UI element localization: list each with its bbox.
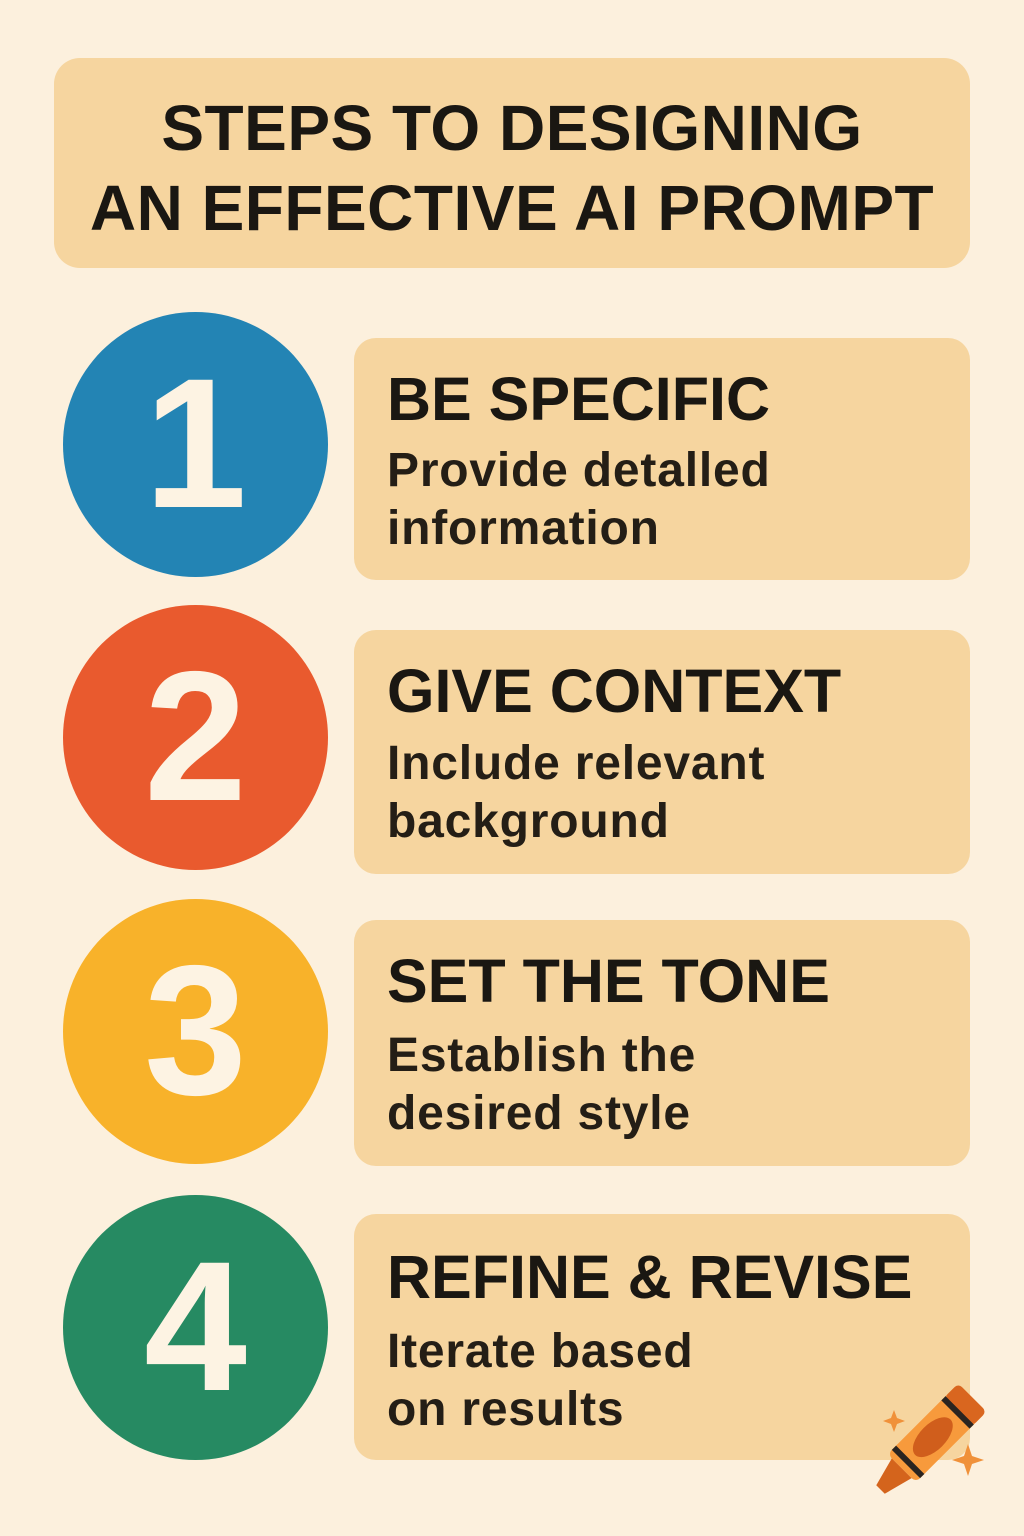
circle 2	[63, 605, 328, 870]
circle 2: 2	[144, 634, 247, 840]
card 3	[354, 920, 970, 1166]
card 4: Iterate based	[387, 1325, 694, 1378]
card 2: Include relevant	[387, 737, 765, 790]
title: STEPS TO DESIGNING	[161, 92, 863, 164]
icon: crayon	[876, 1386, 984, 1494]
card 1: Provide detalled	[387, 444, 771, 497]
circle 3	[63, 899, 328, 1164]
circle 1: 1	[144, 341, 247, 547]
circle 4: 4	[144, 1224, 247, 1430]
card 2: background	[387, 795, 670, 848]
circle 1	[63, 312, 328, 577]
title: AN EFFECTIVE AI PROMPT	[90, 172, 934, 244]
circle 3: 3	[144, 928, 247, 1134]
card 1: BE SPECIFIC	[387, 365, 770, 433]
circle 4	[63, 1195, 328, 1460]
card 4	[354, 1214, 970, 1460]
card 3: SET THE TONE	[387, 947, 830, 1015]
card 3: desired style	[387, 1087, 691, 1140]
card 2: GIVE CONTEXT	[387, 657, 841, 725]
card 1: information	[387, 502, 660, 555]
card 4: on results	[387, 1383, 624, 1436]
title	[54, 58, 970, 268]
card 4: REFINE & REVISE	[387, 1243, 912, 1311]
card 2	[354, 630, 970, 874]
card 3: Establish the	[387, 1029, 696, 1082]
card 1	[354, 338, 970, 580]
